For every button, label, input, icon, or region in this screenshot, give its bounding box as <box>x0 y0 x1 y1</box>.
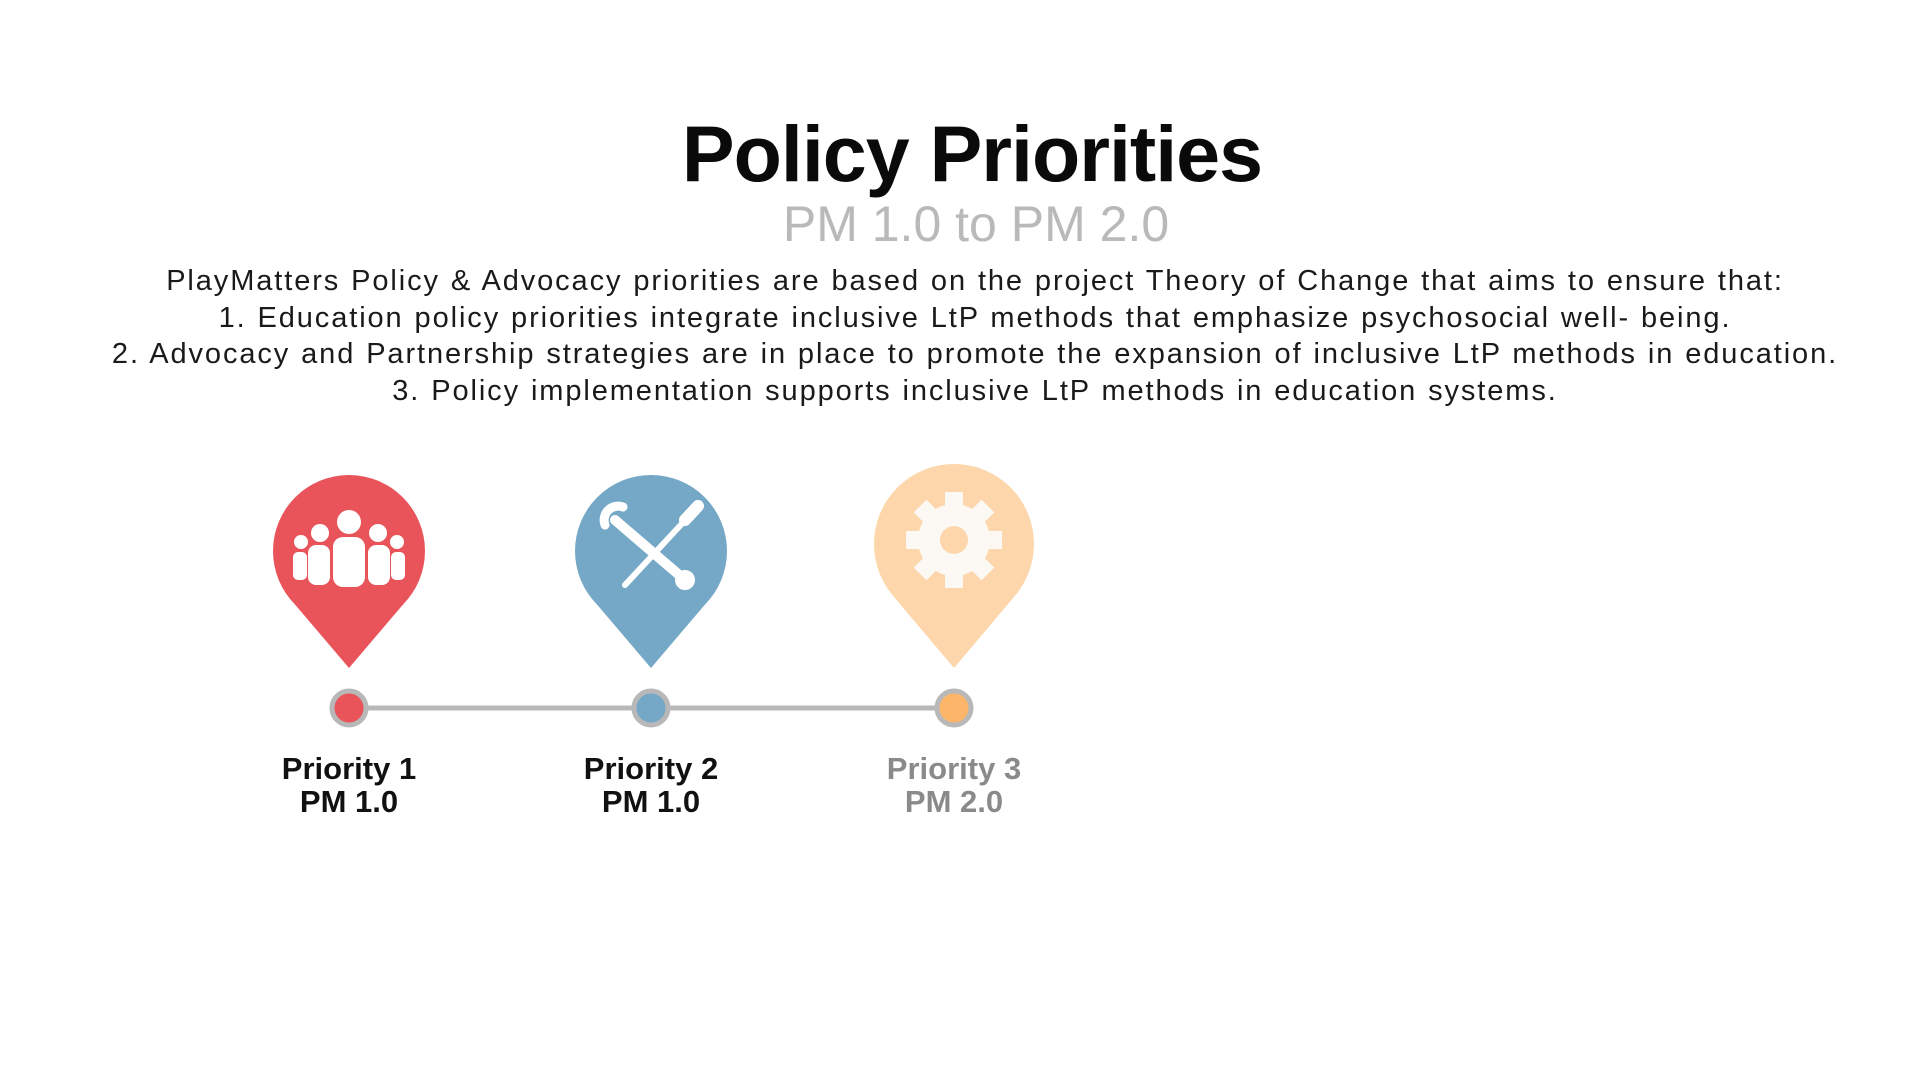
dot 2 <box>634 691 668 725</box>
label priority 1: PM 1.0 <box>300 784 398 819</box>
label priority 3 <box>887 751 1021 819</box>
subtitle: PM 1.0 to PM 2.0 <box>783 196 1169 252</box>
pin 3: gear <box>874 464 1034 668</box>
intro text: 2. Advocacy and Partnership strategies are in place to promote the expansion of inclusive LtP methods in education. <box>112 338 1838 370</box>
intro text: 3. Policy implementation supports inclusive LtP methods in education systems. <box>392 375 1558 407</box>
label priority 2 <box>584 751 718 819</box>
label priority 3: PM 2.0 <box>905 784 1003 819</box>
dot 3 <box>937 691 971 725</box>
label priority 1: Priority 1 <box>282 751 416 786</box>
label priority 3: Priority 3 <box>887 751 1021 786</box>
pin 1: people <box>273 475 425 668</box>
pin 2: tools <box>575 475 727 668</box>
intro text: PlayMatters Policy & Advocacy priorities are based on the project Theory of Change that aims to ensure that: <box>166 265 1784 297</box>
intro text <box>112 265 1838 407</box>
title: Policy Priorities <box>682 109 1262 198</box>
timeline line <box>349 706 954 710</box>
dot 1 <box>332 691 366 725</box>
label priority 2: PM 1.0 <box>602 784 700 819</box>
label priority 1 <box>282 751 416 819</box>
intro text: 1. Education policy priorities integrate inclusive LtP methods that emphasize psychosocial well- being. <box>219 302 1731 334</box>
label priority 2: Priority 2 <box>584 751 718 786</box>
